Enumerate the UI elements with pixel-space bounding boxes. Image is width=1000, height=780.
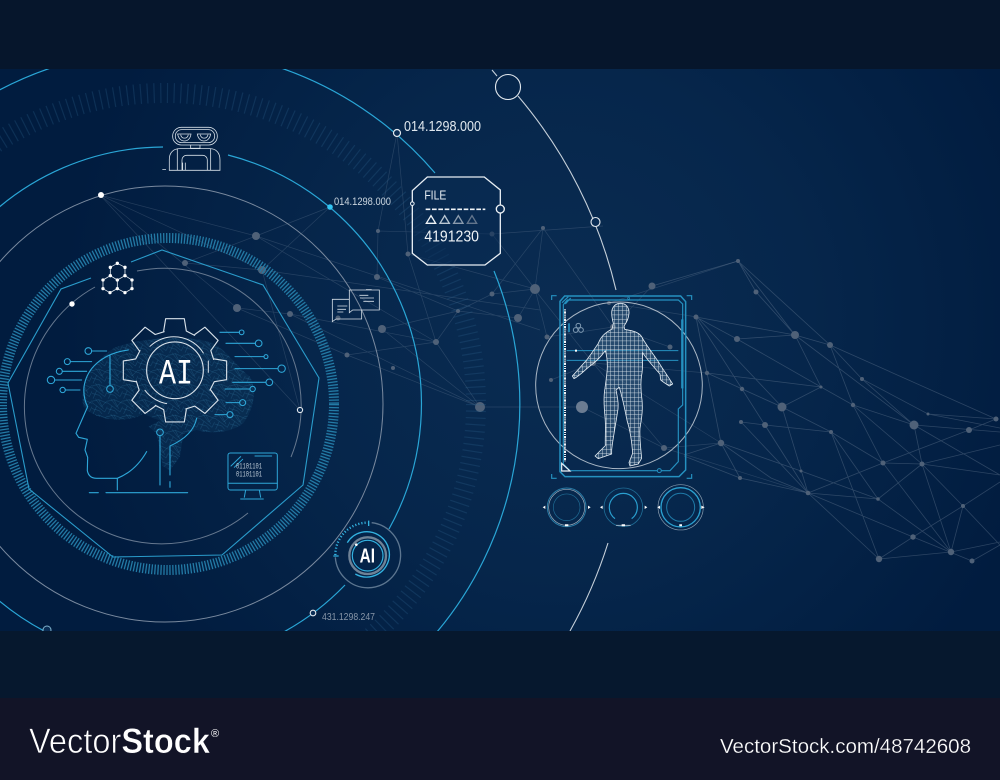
solid dots [69, 192, 333, 307]
gear with AI label: AI [159, 354, 193, 394]
coordinate labels: 431.1298.247 [322, 611, 375, 623]
wireframe brain [83, 338, 254, 471]
corner marker [562, 463, 570, 471]
frame [552, 296, 692, 478]
trefoil icon [573, 323, 583, 332]
faint tick ring [0, 83, 486, 631]
dial 3 [657, 485, 705, 530]
brain wire texture [83, 338, 254, 471]
human body scanner panel [536, 296, 705, 530]
circuit nodes [47, 330, 285, 436]
file card: 4191230 [424, 228, 479, 245]
grey ring [0, 186, 383, 622]
scanner circle [536, 302, 702, 469]
monitor icon [228, 453, 277, 499]
concentric HUD rings [0, 69, 616, 631]
left network lines [100, 133, 808, 493]
coordinate labels: 014.1298.000 [334, 196, 391, 208]
signal triangles [426, 216, 477, 223]
AI head illustration [47, 262, 285, 499]
outer cyan arcs [0, 65, 520, 640]
small AI badge [333, 521, 401, 588]
head profile [76, 350, 197, 493]
monitor icon: 01101101 [236, 463, 262, 472]
small AI badge: AI [360, 545, 375, 568]
monitor icon: 01101101 [236, 471, 262, 480]
orbit markers [43, 74, 600, 634]
coordinate labels [322, 119, 481, 623]
white scale [562, 309, 568, 462]
file card: FILE [424, 189, 446, 203]
dense tick ring [2, 238, 334, 570]
middle cyan arcs [0, 147, 421, 634]
plexus network [100, 133, 1000, 564]
file card [410, 177, 504, 265]
inner grey arcs [24, 268, 301, 544]
watermark url: VectorStock.com/48742608 [720, 736, 971, 758]
watermark logo: VectorStock [29, 722, 210, 761]
dial 1 [543, 488, 591, 527]
molecule icon [101, 262, 134, 294]
wireframe human figure [572, 303, 673, 466]
chat bubbles icon [332, 290, 379, 322]
robot icon [162, 127, 220, 170]
octagon frame [8, 250, 319, 557]
coordinate labels: 014.1298.000 [404, 119, 481, 135]
large white orbit arc [492, 70, 616, 631]
gear with AI label [123, 319, 227, 422]
dial 2 [600, 488, 647, 527]
registered mark: ® [211, 728, 219, 740]
network nodes [182, 226, 998, 564]
scan marker [575, 350, 577, 352]
right network lines [652, 261, 1000, 561]
